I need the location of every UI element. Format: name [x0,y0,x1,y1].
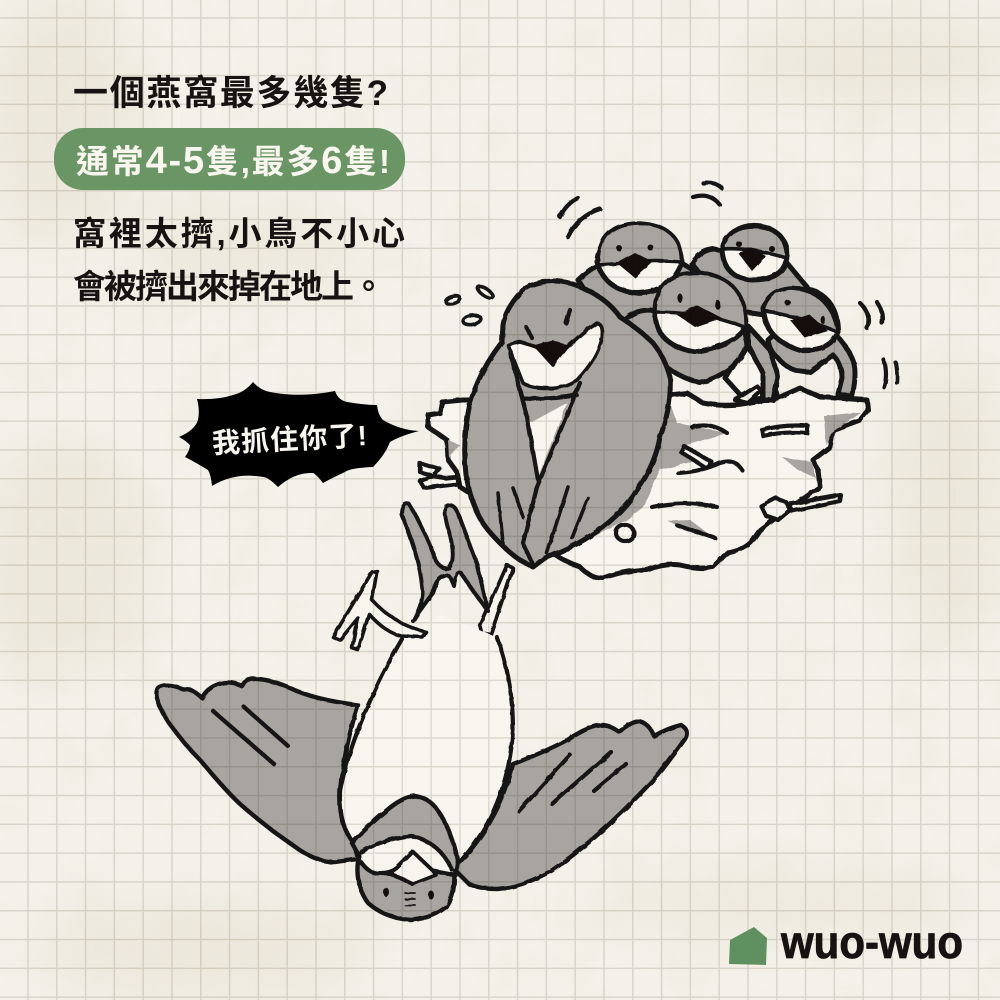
motion lines [560,183,897,387]
chick: back right [692,225,807,320]
main bird chest [530,403,567,477]
speech burst [179,382,419,487]
main bird face [508,323,602,388]
nest twigs [420,425,841,541]
leg from main bird [480,565,513,634]
answer pill [54,128,405,190]
body text: 會被擠出來掉在地上。 [73,268,385,305]
title: 一個燕窩最多幾隻? [73,74,388,113]
nest shadow [556,400,727,552]
falling chick legs [333,571,426,650]
nest [420,388,868,578]
chick: front centre [623,273,778,403]
falling chick tail [402,504,488,621]
falling chick head [352,796,458,920]
answer pill: 通常4-5隻,最多6隻! [76,140,390,182]
speech burst: 我抓住你了! [211,420,368,459]
falling chick left wing [156,679,358,862]
main bird holding the falling chick [465,281,670,567]
icon: house [729,927,767,965]
sweat drops [445,284,494,326]
body text: 窩裡太擠,小鳥不小心 [73,215,405,252]
falling chick right wing [456,721,687,889]
chick: back left [578,223,700,330]
chick: front right [763,288,855,397]
falling chick body [340,615,513,864]
logo: wuo-wuo [780,916,963,968]
body text [73,215,405,305]
